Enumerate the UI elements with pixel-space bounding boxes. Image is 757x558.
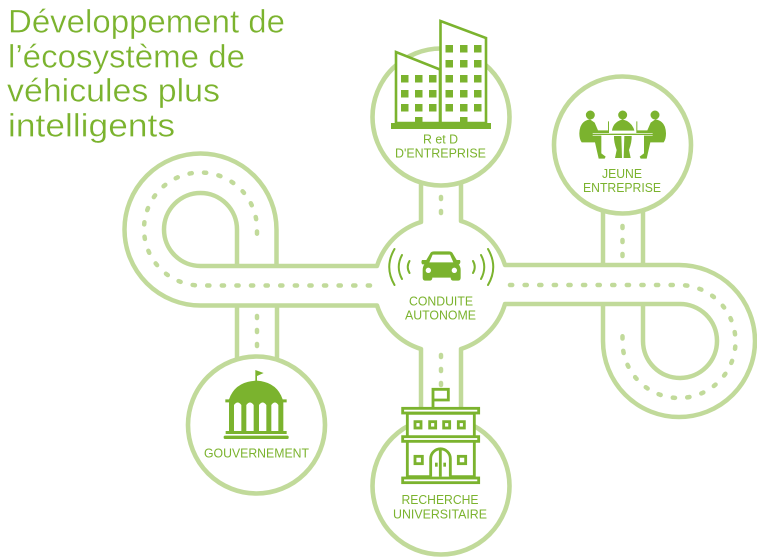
label: JEUNE (602, 167, 642, 181)
label (395, 132, 486, 160)
node: recherche universitaire (372, 389, 510, 554)
road: government connector (237, 306, 277, 362)
label: GOUVERNEMENT (204, 447, 309, 461)
icon: connected car (421, 251, 461, 281)
label: RECHERCHE (402, 493, 478, 507)
road: startup connector (603, 208, 643, 265)
title: Développement de (8, 4, 285, 40)
title: l’écosystème de (8, 39, 245, 75)
label: R et D (423, 132, 458, 146)
label: UNIVERSITAIRE (393, 508, 487, 522)
icon: office buildings (391, 21, 491, 129)
road network (124, 154, 755, 420)
icon: signal waves left (389, 249, 410, 285)
title (7, 4, 285, 144)
label: ENTREPRISE (583, 181, 661, 195)
node circle (372, 48, 510, 186)
icon: domed government building (224, 370, 289, 439)
road: right loop inner edge (461, 304, 717, 420)
node: jeune entreprise (554, 76, 691, 214)
label: D'ENTREPRISE (395, 146, 486, 160)
label (393, 493, 487, 522)
dashes: left loop (144, 172, 370, 286)
node circle (372, 418, 510, 554)
icon: signal waves right (473, 249, 493, 285)
title: intelligents (8, 108, 175, 144)
node: gouvernement (188, 356, 325, 494)
node circle (188, 356, 325, 494)
title: véhicules plus (7, 73, 220, 109)
node: conduite autonome (389, 249, 493, 323)
road: left loop and upper-left junction (164, 180, 421, 266)
node circle (554, 76, 691, 214)
label (583, 167, 661, 195)
label (405, 295, 476, 323)
label: CONDUITE (409, 295, 473, 309)
icon: people at a table (579, 110, 666, 159)
label: AUTONOME (405, 309, 476, 323)
node: R et D d'entreprise (372, 21, 510, 186)
road: right loop outer edge (461, 180, 755, 417)
dashes: connectors (257, 197, 622, 385)
icon: university building (403, 389, 479, 483)
road: left loop outer edge (124, 154, 421, 420)
dashes: right loop (510, 285, 736, 398)
